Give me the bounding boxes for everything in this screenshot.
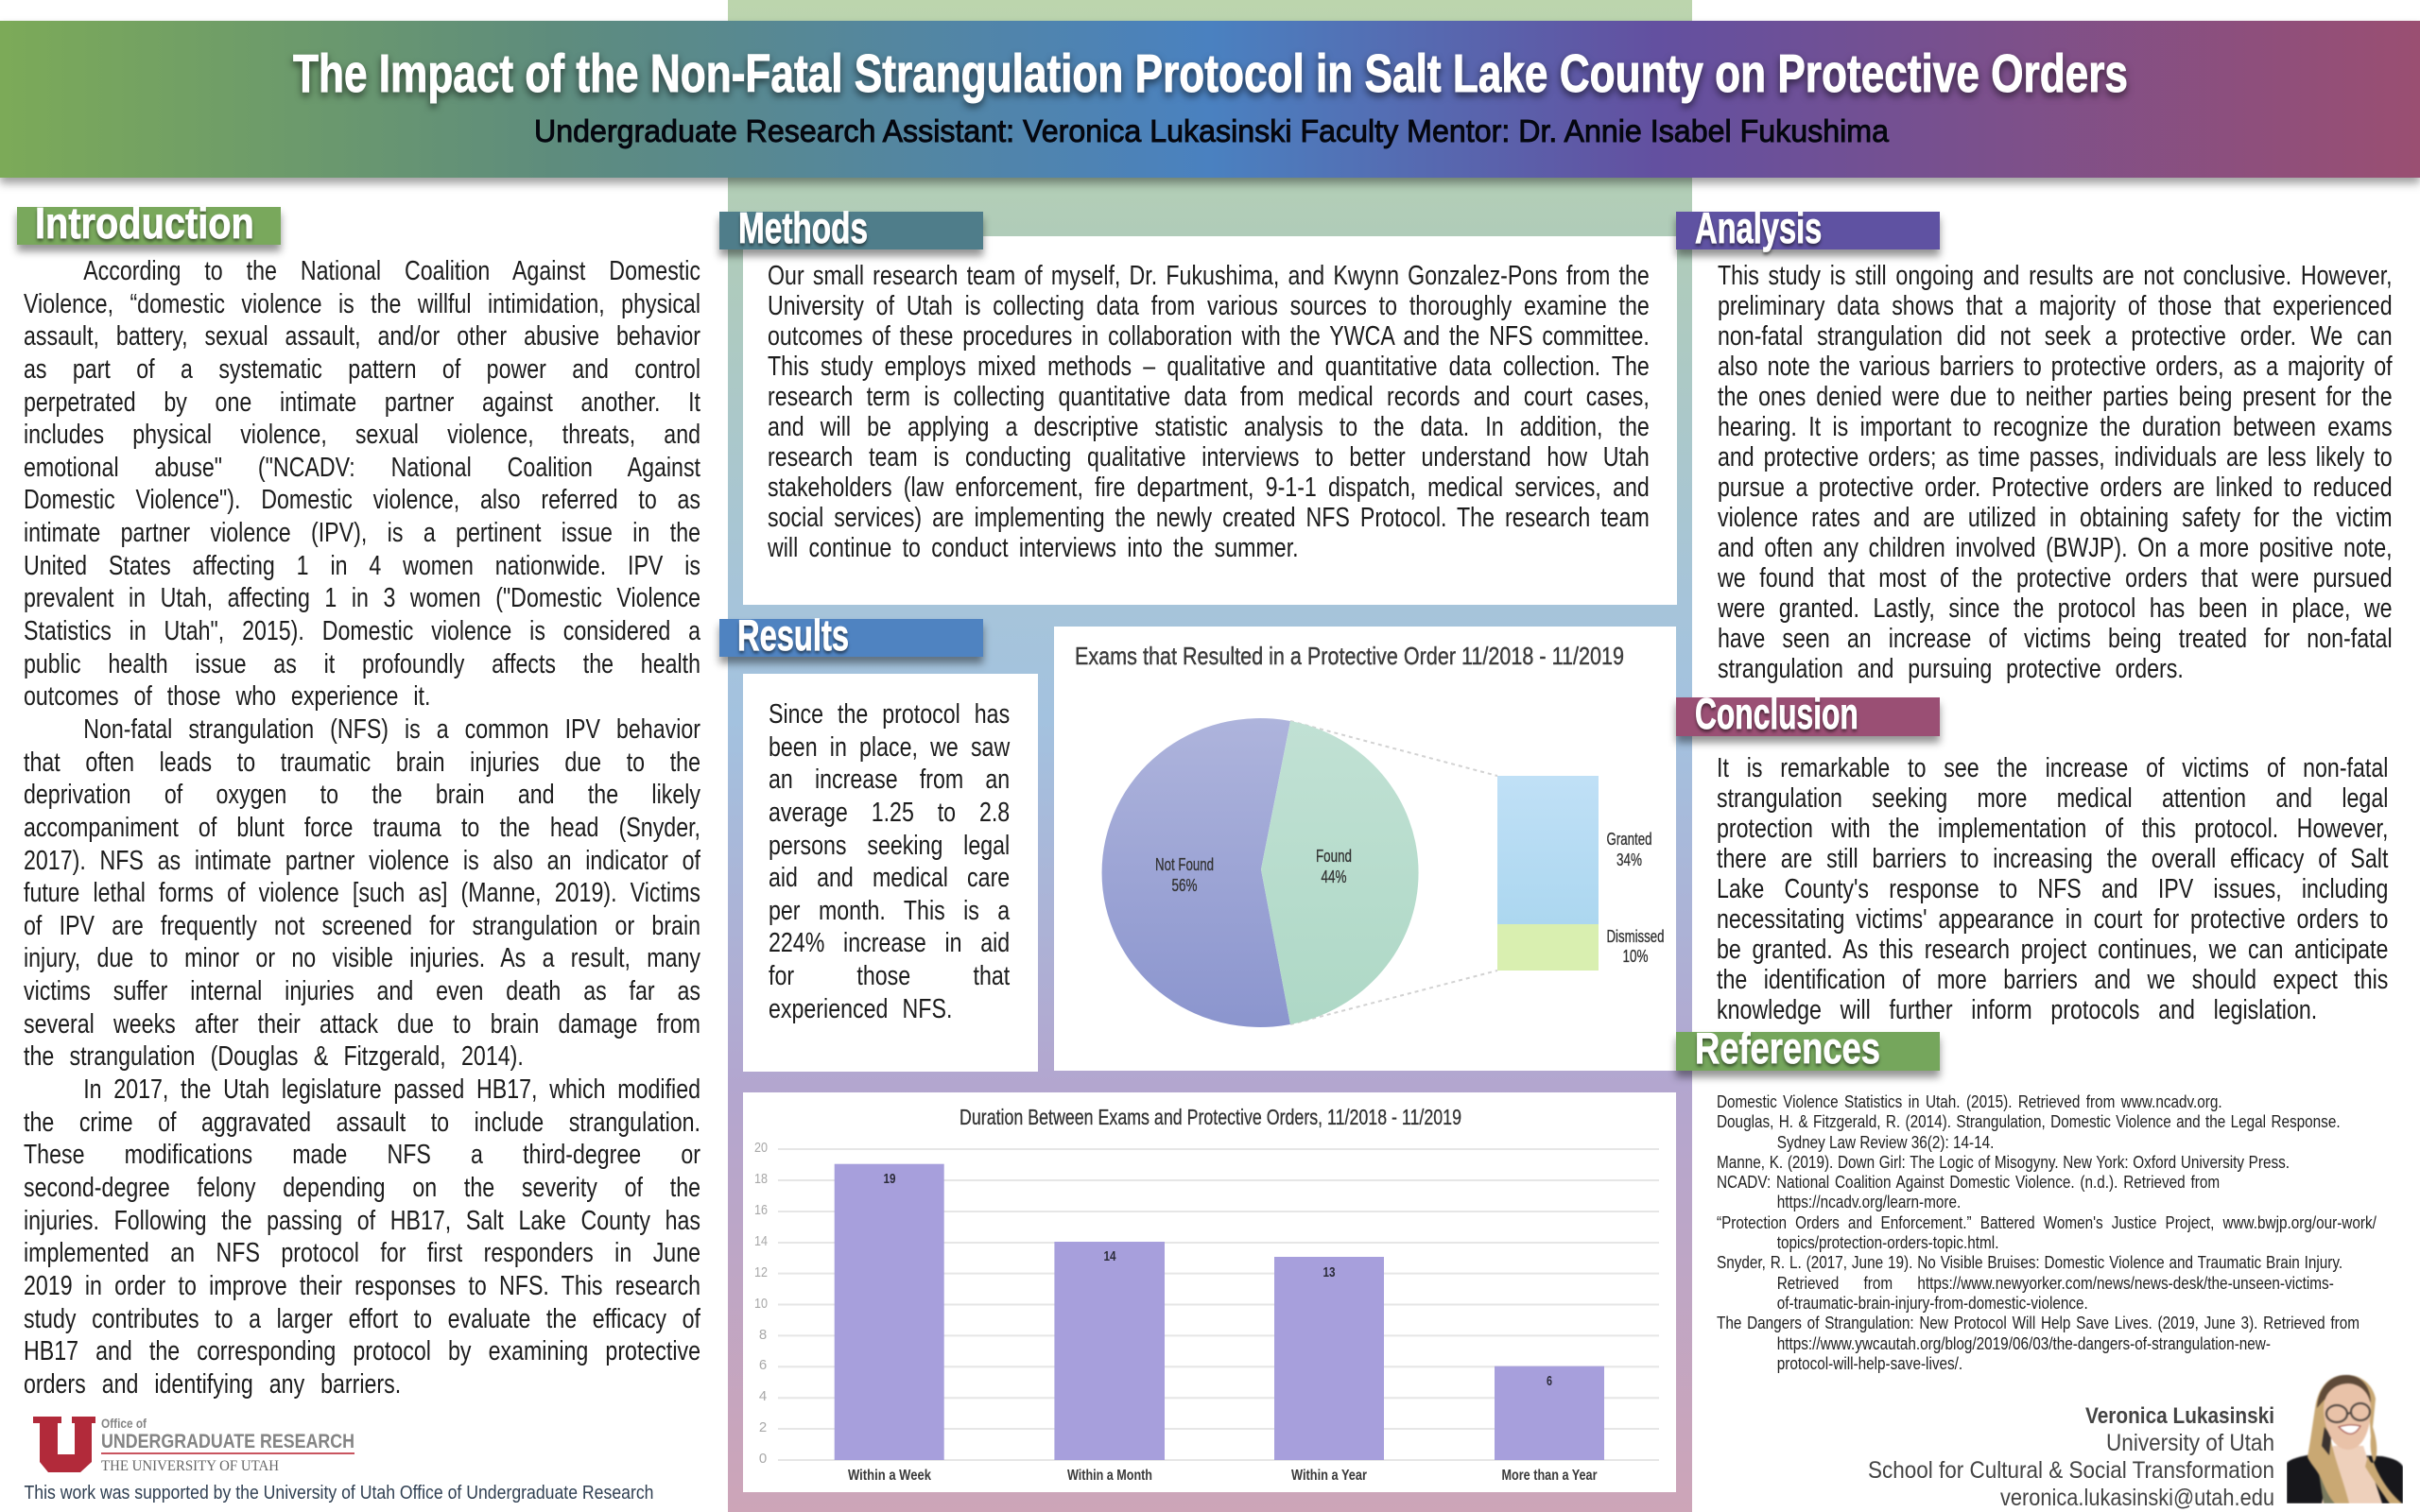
text block: results: per month. This is a [769, 896, 1010, 926]
y axis labels [754, 1140, 768, 1467]
text block: analysis: we found that most of the protective orders that were pursued [1718, 563, 2393, 593]
heading: References: References [1695, 1023, 1880, 1073]
x axis labels: More than a Year [1501, 1468, 1598, 1484]
value labels: 6 [1547, 1373, 1552, 1389]
text block: methods: social services) are implementing the newly created NFS Protocol. The research team [768, 503, 1650, 533]
text block: introduction: perpetrated by one intimate partner against another. It [24, 387, 700, 418]
text block: conclusion: the identification of more barriers and we should expect this [1717, 965, 2388, 995]
heading: Results: Results [737, 610, 849, 660]
y axis labels: 12 [754, 1264, 768, 1280]
text block: analysis: hearing. It is important to recognize the duration between exams [1718, 412, 2393, 442]
header banner [0, 21, 2420, 178]
text block: introduction: as part of a systematic pattern of power and control [24, 354, 700, 385]
text block: references: Manne, K. (2019). Down Girl: The Logic of Misogyny. New York: Oxford University Press. [1717, 1153, 2290, 1172]
text block: references: “Protection Orders and Enforcement.” Battered Women's Justice Project, www.bwjp.org/our-work/ [1717, 1213, 2377, 1232]
text block: introduction [24, 256, 701, 1400]
text block: references: https://ncadv.org/learn-more. [1777, 1193, 1961, 1211]
panel: pie chart [1054, 627, 1676, 1071]
pie labels [1155, 830, 1664, 966]
text block: analysis: also note the various barriers to protective orders, as a majority of [1718, 352, 2393, 382]
text block: conclusion: Lake County's response to NFS and IPV issues, including [1717, 874, 2388, 904]
author contact block [1868, 1403, 2274, 1511]
text block: methods: This study employs mixed methods – qualitative and quantitative data collection. The [768, 352, 1650, 382]
heading: Methods [719, 212, 983, 249]
text block: conclusion: be granted. As this research project continues, we can anticipate [1717, 935, 2388, 965]
pie slice: not found [1102, 718, 1290, 1027]
text block: references: Domestic Violence Statistics in Utah. (2015). Retrieved from www.ncadv.org. [1717, 1092, 2222, 1111]
text block: introduction: assault, battery, sexual assault, and/or other abusive behavior [24, 321, 700, 352]
text block: results: persons seeking legal [769, 831, 1010, 861]
text block: references: https://www.ywcautah.org/blog/2019/06/03/the-dangers-of-strangulation-new- [1777, 1334, 2271, 1353]
text block: references: NCADV: National Coalition Against Domestic Violence. (n.d.). Retrieved from [1717, 1173, 2220, 1192]
pie labels: Not Found [1155, 855, 1214, 874]
logo: Office of Undergraduate Research [33, 1416, 354, 1474]
text block: introduction: accompaniment of blunt force trauma to the head (Snyder, [24, 813, 700, 843]
icon: author portrait [2287, 1374, 2403, 1503]
text block: introduction: that often leads to traumatic brain injuries due to the [24, 747, 700, 778]
pie labels: 10% [1622, 947, 1649, 966]
text block: methods: stakeholders (law enforcement, fire department, 9-1-1 dispatch, medical services, and [768, 472, 1650, 503]
text block: references: Sydney Law Review 36(2): 14-14. [1777, 1133, 1994, 1152]
text block: introduction: Statistics in Utah", 2015). Domestic violence is considered a [24, 616, 700, 646]
text block: conclusion [1717, 753, 2388, 1025]
heading: Conclusion [1676, 697, 1940, 736]
text block: methods: will continue to conduct interviews into the summer. [768, 533, 1299, 563]
bars [835, 1164, 1604, 1460]
text block: introduction: According to the National Coalition Against Domestic [83, 256, 700, 286]
text block: introduction: public health issue as it profoundly affects the health [24, 649, 700, 679]
text block: introduction: deprivation of oxygen to the brain and the likely [24, 780, 700, 810]
text block: introduction: victims suffer internal injuries and even death as far as [24, 976, 700, 1006]
text block: analysis: strangulation and pursuing protective orders. [1718, 654, 2184, 684]
text block: introduction: United States affecting 1 in 4 women nationwide. IPV is [24, 551, 700, 581]
text block: introduction: implemented an NFS protocol for first responders in June [24, 1238, 700, 1268]
logo wording [101, 1416, 354, 1474]
text block: conclusion: It is remarkable to see the increase of victims of non-fatal [1717, 753, 2388, 783]
text block: results: Since the protocol has [769, 699, 1010, 730]
icon: University of Utah block U [33, 1417, 95, 1472]
x axis labels: Within a Year [1291, 1468, 1367, 1484]
text block: results: an increase from an [769, 765, 1010, 795]
y axis labels: 20 [754, 1140, 768, 1156]
text block: methods: University of Utah is collecting data from various sources to thoroughly examine the [768, 291, 1650, 321]
y axis labels: 0 [759, 1451, 767, 1467]
stacked bar: granted [1497, 776, 1599, 924]
text block: conclusion: there are still barriers to increasing the overall efficacy of Salt [1717, 844, 2388, 874]
y axis labels: 18 [754, 1171, 768, 1187]
connector lines [1290, 721, 1497, 1024]
y axis labels: 10 [754, 1296, 768, 1312]
text block: references [1717, 1092, 2377, 1373]
text block: introduction: 2017). NFS as intimate partner violence is also an indicator of [24, 846, 700, 876]
text block: results: aid and medical care [769, 863, 1010, 893]
text block: references: of-traumatic-brain-injury-from-domestic-violence. [1777, 1294, 2088, 1313]
text block: conclusion: strangulation seeking more medical attention and legal [1717, 783, 2388, 814]
heading: Analysis [1676, 212, 1940, 249]
text block: introduction: second-degree felony depending on the severity of the [24, 1173, 700, 1203]
text block: results: experienced NFS. [769, 994, 952, 1024]
x axis labels: Within a Week [848, 1468, 931, 1484]
heading: Methods: Methods [738, 203, 868, 252]
text block: references: The Dangers of Strangulation: New Protocol Will Help Save Lives. (2019, June 3). Retrieved from [1717, 1314, 2360, 1332]
text block: references: Snyder, R. L. (2017, June 19). No Visible Bruises: Domestic Violence and Traumatic Brain Injury. [1717, 1253, 2342, 1272]
heading: Introduction [17, 207, 281, 245]
text block: introduction: the crime of aggravated assault to include strangulation. [24, 1108, 700, 1138]
text block: introduction: Non-fatal strangulation (NFS) is a common IPV behavior [83, 714, 700, 745]
panel: bar chart [743, 1092, 1676, 1492]
value labels: 13 [1323, 1264, 1335, 1280]
y axis labels: 6 [759, 1357, 767, 1373]
text block: methods: outcomes of these procedures in collaboration with the YWCA and the NFS committee. [768, 321, 1650, 352]
logo wording: THE UNIVERSITY OF UTAH [101, 1458, 279, 1474]
text block: introduction: the strangulation (Douglas & Fitzgerald, 2014). [24, 1041, 524, 1072]
text block: introduction: future lethal forms of violence [such as] (Manne, 2019). Victims [24, 878, 700, 908]
text block: introduction: outcomes of those who experience it. [24, 681, 430, 712]
text block: introduction: includes physical violence, sexual violence, threats, and [24, 420, 700, 450]
text block: analysis: and often any children involved (BWJP). On a more positive note, [1718, 533, 2393, 563]
text block: analysis: have seen an increase of victims being treated for non-fatal [1718, 624, 2393, 654]
pie labels: Found [1316, 847, 1352, 866]
text block: analysis: violence rates and are utilized in obtaining safety for the victim [1718, 503, 2393, 533]
text block: introduction: of IPV are frequently not screened for strangulation or brain [24, 911, 700, 941]
text block: references: Retrieved from https://www.newyorker.com/news/news-desk/the-unseen-victims- [1777, 1274, 2334, 1293]
panel: results text [743, 674, 1038, 1072]
text block: introduction: prevalent in Utah, affecting 1 in 3 women ("Domestic Violence [24, 583, 700, 613]
text block: results: been in place, we saw [769, 732, 1010, 763]
text block: conclusion: protection with the implementation of this protocol. However, [1717, 814, 2388, 844]
y axis labels: 8 [759, 1327, 767, 1343]
value labels: 14 [1104, 1248, 1116, 1264]
subtitle: authors: Undergraduate Research Assistant: Veronica Lukasinski Faculty Mentor: Dr. Annie Isabel Fukushima [534, 113, 1890, 148]
text block: introduction: 2019 in order to improve their responses to NFS. This research [24, 1271, 700, 1301]
text block: introduction: injuries. Following the passing of HB17, Salt Lake County has [24, 1206, 700, 1236]
text block: results: for those that [769, 961, 1010, 991]
heading: Introduction: Introduction [35, 198, 254, 248]
chart title: Duration Between Exams and Protective Orders, 11/2018 - 11/2019 [959, 1105, 1461, 1129]
heading: References [1676, 1032, 1940, 1071]
text block: conclusion: knowledge will further inform protocols and legislation. [1717, 995, 2317, 1025]
text block: introduction: HB17 and the corresponding protocol by examining protective [24, 1336, 700, 1366]
text block: references: protocol-will-help-save-lives/. [1777, 1354, 1962, 1373]
value labels [883, 1171, 1552, 1389]
text block: introduction: These modifications made NFS a third-degree or [24, 1140, 700, 1170]
text block: introduction: Violence, “domestic violence is the willful intimidation, physical [24, 289, 700, 319]
y axis labels: 16 [754, 1202, 768, 1218]
text block: methods [768, 261, 1650, 563]
pie chart: exams that resulted in a protective order [1075, 642, 1664, 1027]
stacked bar: dismissed [1497, 924, 1599, 971]
text block: analysis: the ones denied were due to neither parties being present for the [1718, 382, 2393, 412]
text block: references: Douglas, H. & Fitzgerald, R. (2014). Strangulation, Domestic Violence and the Legal Response. [1717, 1112, 2341, 1131]
text block: results [769, 699, 1010, 1024]
logo wording: Office of [101, 1416, 147, 1431]
text block: analysis [1718, 261, 2393, 684]
text block: introduction: In 2017, the Utah legislature passed HB17, which modified [83, 1074, 700, 1105]
pie labels: 44% [1322, 868, 1346, 886]
text block: analysis: pursue a protective order. Protective orders are linked to reduced [1718, 472, 2393, 503]
heading: Conclusion: Conclusion [1695, 689, 1858, 738]
text block: results: average 1.25 to 2.8 [769, 798, 1010, 828]
text block: analysis: This study is still ongoing and results are not conclusive. However, [1718, 261, 2393, 291]
text block: introduction: intimate partner violence (IPV), is a pertinent issue in the [24, 518, 700, 548]
text block: conclusion: necessitating victims' appearance in court for protective orders to [1717, 904, 2388, 935]
text block: introduction: study contributes to a larger effort to evaluate the efficacy of [24, 1304, 700, 1334]
text block: methods: research term is collecting quantitative data from medical records and court cases, [768, 382, 1650, 412]
text block: analysis: preliminary data shows that a majority of those that experienced [1718, 291, 2393, 321]
text block: introduction: injury, due to minor or no visible injuries. As a result, many [24, 943, 700, 973]
text block: introduction: emotional abuse" ("NCADV: National Coalition Against [24, 453, 700, 483]
x axis labels: Within a Month [1067, 1468, 1152, 1484]
x axis labels [848, 1468, 1598, 1484]
bar chart: duration between exams and protective orders [754, 1105, 1659, 1484]
text block: introduction: Domestic Violence"). Domestic violence, also referred to as [24, 485, 700, 515]
heading: Results [719, 619, 983, 657]
text block: analysis: were granted. Lastly, since the protocol has been in place, we [1718, 593, 2393, 624]
pie labels: 56% [1172, 876, 1197, 895]
text block: methods: Our small research team of myself, Dr. Fukushima, and Kwynn Gonzalez-Pons from the [768, 261, 1650, 291]
text block: methods: research team is conducting qualitative interviews to better understand how Utah [768, 442, 1650, 472]
pie labels: Granted [1607, 830, 1652, 849]
text block: results: 224% increase in aid [769, 928, 1010, 958]
text block: references: topics/protection-orders-topic.html. [1777, 1233, 1998, 1252]
text block: methods: and will be applying a descriptive statistic analysis to the data. In addition, the [768, 412, 1650, 442]
y axis labels: 4 [759, 1388, 767, 1404]
pie slice: found [1261, 721, 1419, 1024]
pie labels: 34% [1616, 850, 1642, 869]
center column gradient background [728, 0, 1692, 1512]
text block: introduction: orders and identifying any barriers. [24, 1369, 401, 1400]
y axis labels: 2 [759, 1419, 767, 1435]
heading: Analysis: Analysis [1695, 203, 1822, 252]
text block: introduction: several weeks after their attack due to brain damage from [24, 1009, 700, 1040]
text block: analysis: and protective orders; as time passes, individuals are less likely to [1718, 442, 2393, 472]
y axis labels: 14 [754, 1233, 768, 1249]
value labels: 19 [883, 1171, 896, 1187]
text block: analysis: non-fatal strangulation did not seek a protective order. We can [1718, 321, 2393, 352]
panel: methods [743, 236, 1677, 605]
